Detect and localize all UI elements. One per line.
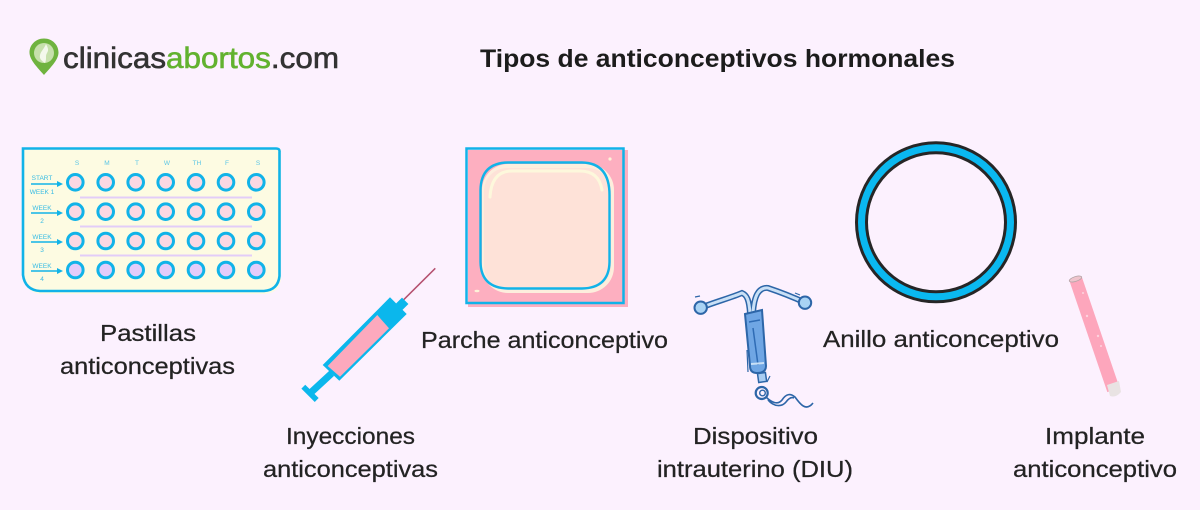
weekday letters: TH <box>193 160 202 167</box>
week labels and arrows: WEEK 1 <box>30 189 55 196</box>
panel: pastillas anticonceptivas <box>23 148 281 379</box>
icon: syringe <box>303 268 435 400</box>
panel: parche anticonceptivo <box>421 148 668 353</box>
week labels and arrows: START <box>32 175 52 182</box>
week labels and arrows: WEEK <box>32 263 52 270</box>
logo wordmark: clinicasabortos.com <box>63 42 339 75</box>
weekday letters <box>75 160 261 167</box>
icon: green map pin <box>30 38 58 75</box>
week labels and arrows <box>30 175 252 283</box>
label: anticonceptivas <box>60 353 235 379</box>
week labels and arrows: 4 <box>40 276 44 283</box>
icon: implant rod <box>1069 275 1121 396</box>
logo: clinicasabortos.com <box>30 38 339 75</box>
panel: inyecciones anticonceptivas <box>263 268 438 482</box>
panel: anillo anticonceptivo <box>823 148 1059 352</box>
pills grid <box>68 174 264 278</box>
label <box>1013 423 1177 482</box>
label: Pastillas <box>100 320 196 346</box>
label: anticonceptivas <box>263 456 438 482</box>
label <box>657 423 853 482</box>
week labels and arrows: WEEK <box>32 234 52 241</box>
icon: ring <box>862 148 1010 297</box>
label: Implante <box>1045 423 1145 449</box>
week labels and arrows: 3 <box>40 247 44 254</box>
panel: dispositivo intrauterino <box>657 288 853 482</box>
label: Dispositivo <box>693 423 818 449</box>
label: anticonceptivo <box>1013 456 1177 482</box>
label: Anillo anticonceptivo <box>823 326 1059 352</box>
week labels and arrows: 2 <box>40 218 44 225</box>
label <box>60 320 235 379</box>
title: Tipos de anticonceptivos hormonales <box>480 45 955 73</box>
label: Parche anticonceptivo <box>421 327 668 353</box>
weekday letters: T <box>135 160 139 167</box>
icon: patch <box>466 148 628 307</box>
icon: pill pack <box>23 148 281 294</box>
panel: implante anticonceptivo <box>1013 275 1177 482</box>
icon: IUD <box>694 288 813 407</box>
weekday letters: S <box>256 160 261 167</box>
weekday letters: S <box>75 160 80 167</box>
label <box>263 423 438 482</box>
label: Inyecciones <box>286 423 415 449</box>
weekday letters: F <box>225 160 229 167</box>
week labels and arrows: WEEK <box>32 205 52 212</box>
weekday letters: M <box>104 160 110 167</box>
weekday letters: W <box>164 160 171 167</box>
label: intrauterino (DIU) <box>657 456 853 482</box>
